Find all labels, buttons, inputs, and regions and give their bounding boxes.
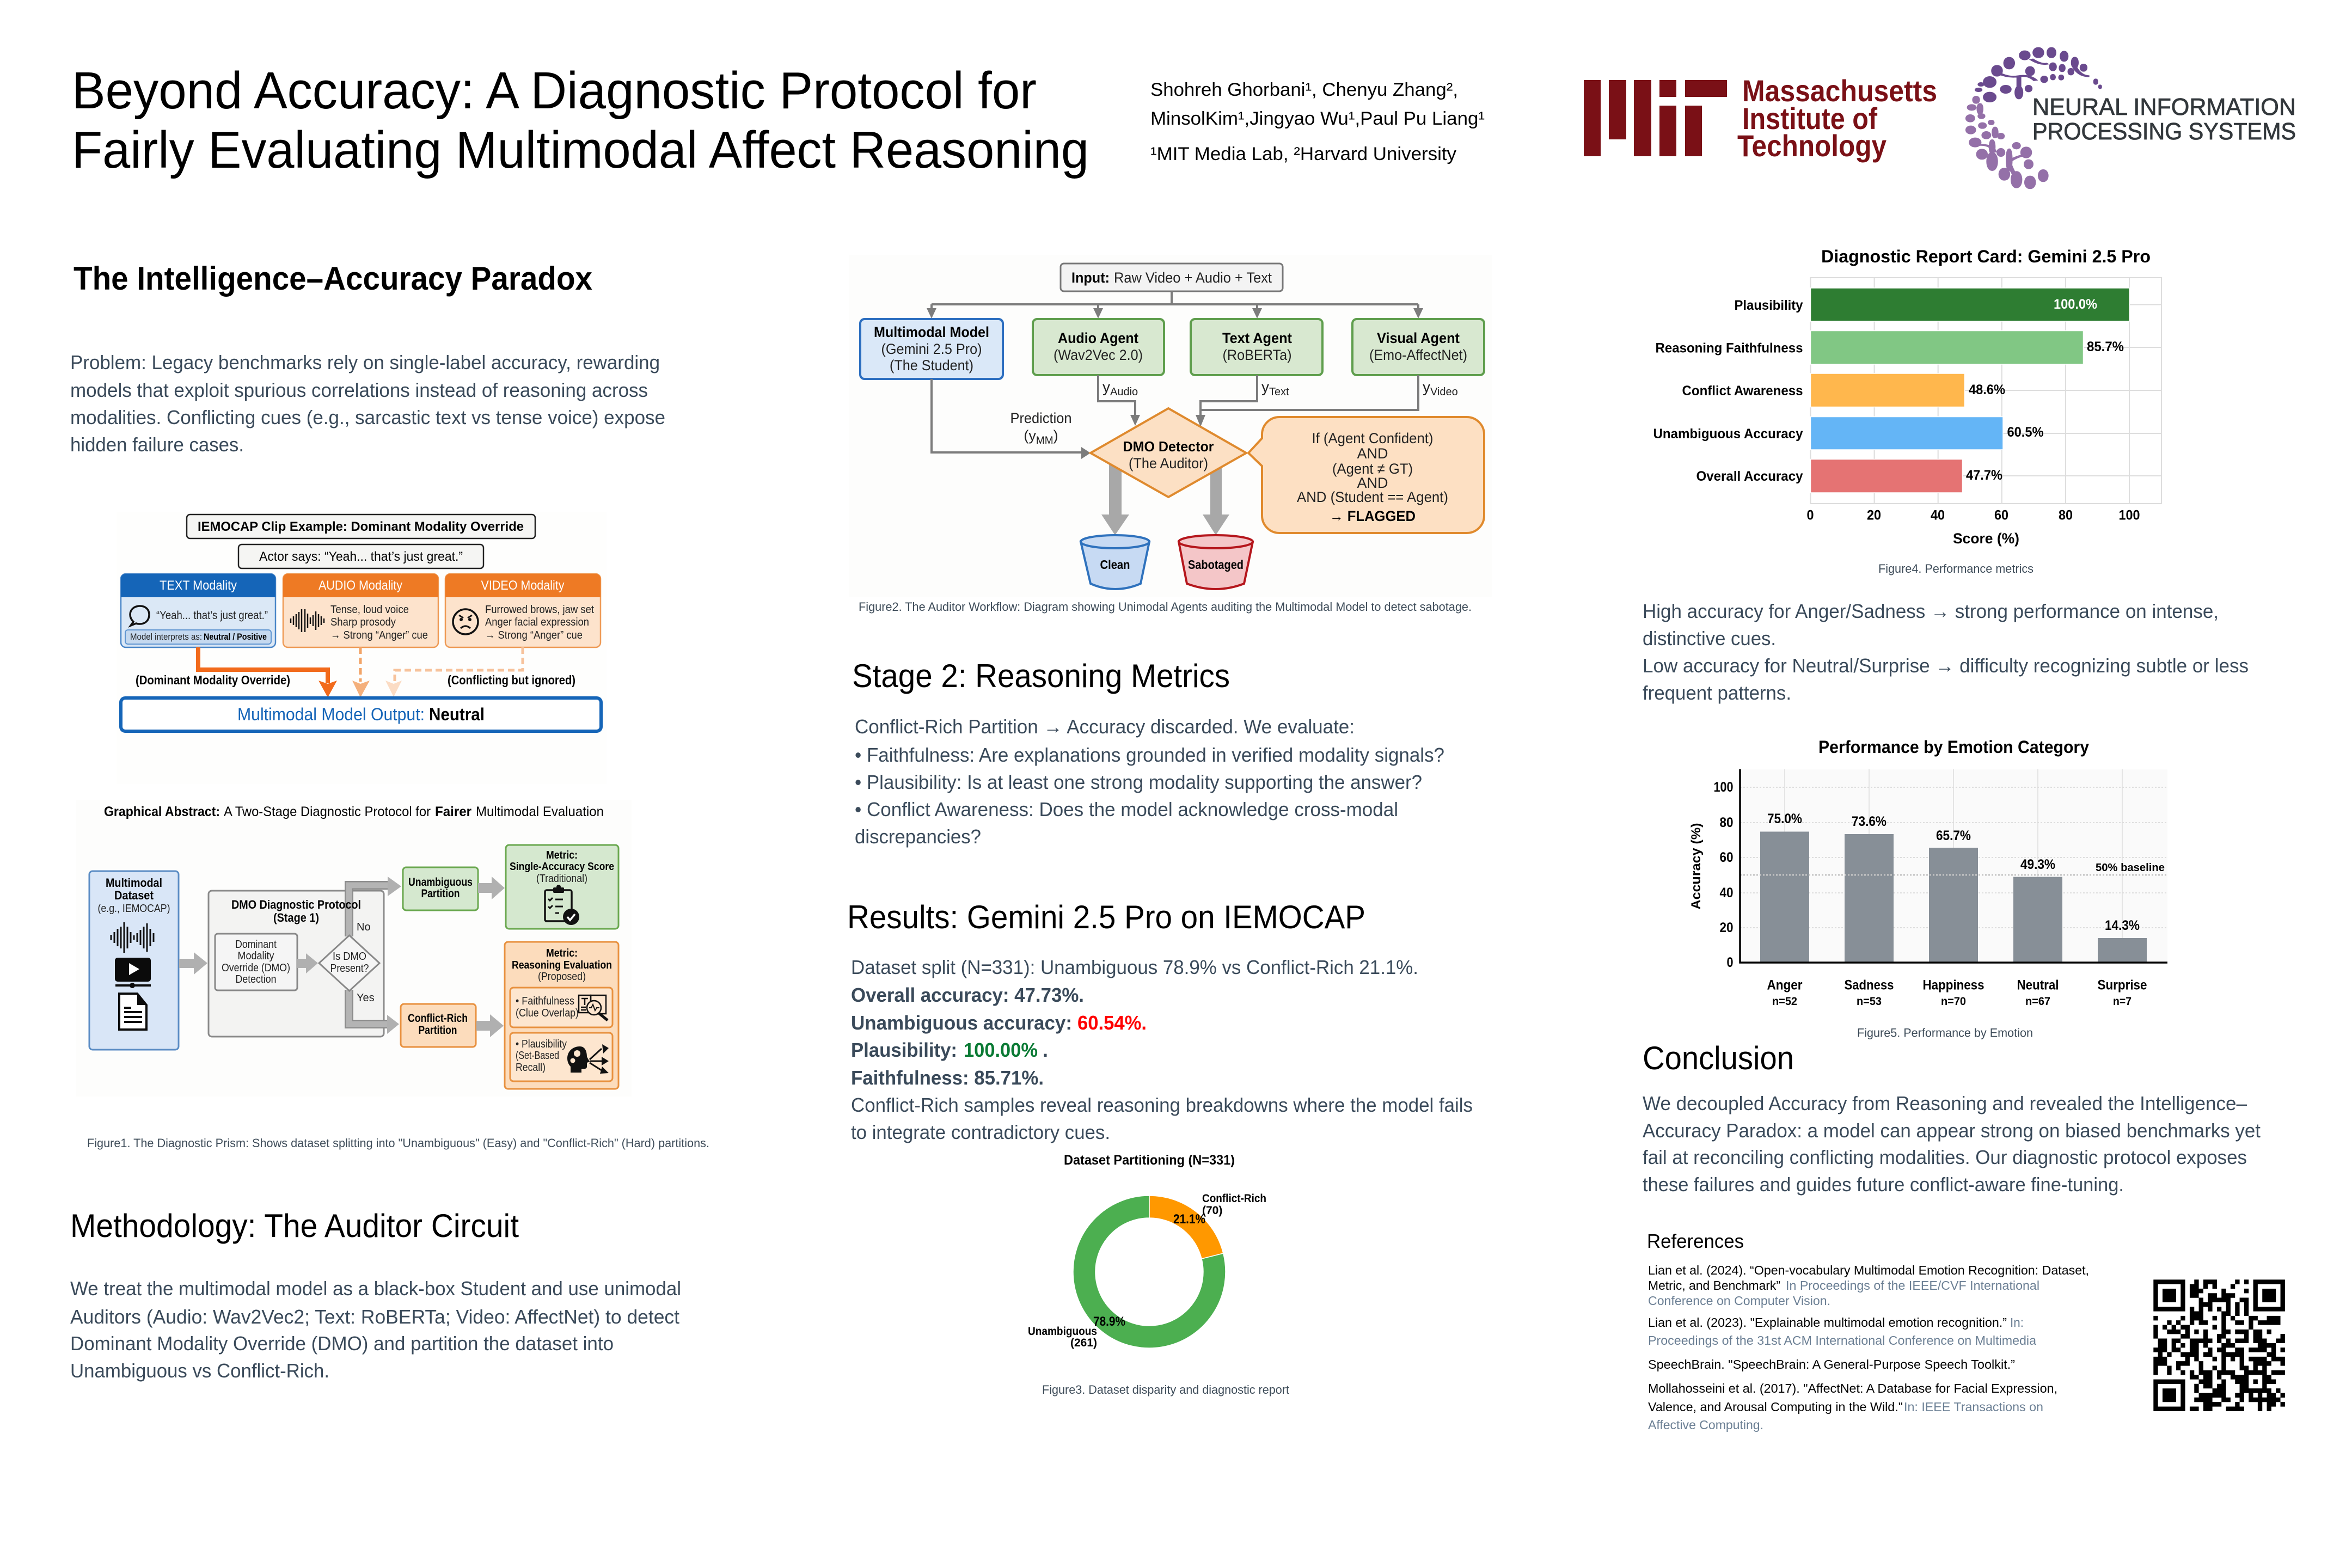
text block: references: Lian et al. (2023). "Explainable multimodal emotion recognition.”: [1648, 1315, 2007, 1330]
diagram: IEMOCAP clip example: [117, 512, 607, 784]
label: unambiguous: (261): [1070, 1337, 1097, 1349]
box: audio agent: [1033, 319, 1164, 375]
heading: conclusion: Conclusion: [1643, 1040, 1794, 1076]
y axis ticks: 0: [1727, 955, 1734, 970]
box: multimodal dataset: Multimodal: [106, 876, 162, 890]
icon: document: [119, 994, 146, 1030]
box: DMO diagnostic protocol: [209, 891, 384, 1037]
card: text modality: [121, 574, 275, 647]
arrow: audio ignored: [352, 647, 370, 697]
icon: speech bubble: [130, 606, 149, 626]
text block: references: In: IEEE Transactions on: [1904, 1400, 2043, 1414]
text block: conclusion: [1643, 1092, 2261, 1196]
box: text agent: (RoBERTa): [1223, 347, 1291, 363]
box: reasoning evaluation metric: Reasoning Evaluation: [512, 959, 612, 971]
card: audio modality: Sharp prosody: [330, 616, 396, 628]
chart: dataset partitioning donut: [1028, 1153, 1266, 1349]
bar: unambiguous accuracy: [1653, 417, 2044, 450]
arrow: dominant modality override: [198, 647, 337, 697]
text block: results: 60.54%.: [1077, 1012, 1147, 1034]
text block: results: Unambiguous accuracy:: [851, 1012, 1072, 1034]
card: audio modality: → Strong “Anger” cue: [330, 629, 428, 641]
logo: MIT: [1584, 74, 1937, 163]
input box: Input:: [1071, 270, 1110, 286]
box: text agent: [1191, 319, 1322, 375]
callout: flagging rule: AND (Student == Agent): [1297, 489, 1448, 505]
text block: references: Metric, and Benchmark”: [1648, 1278, 1780, 1293]
arrow: detection to decision: [297, 953, 318, 973]
box: unambiguous partition: [403, 867, 478, 910]
card: video modality: [445, 574, 601, 647]
bar: surprise: n=7: [2113, 995, 2132, 1008]
label: prediction: ): [1054, 427, 1058, 444]
box: single-accuracy metric: Metric:: [546, 849, 578, 861]
arrow: conflict-rich to metric: [476, 1014, 504, 1037]
text block: references: In:: [2010, 1315, 2024, 1330]
x axis ticks: 80: [2059, 507, 2073, 523]
output box: Multimodal Model Output:: [237, 705, 425, 724]
text block: problem statement: modalities. Conflicting cues (e.g., sarcastic text vs tense voice) expose: [70, 406, 665, 428]
bucket: sabotaged: [1179, 535, 1253, 589]
icon: angry face: [453, 609, 478, 634]
bar: overall accuracy: Overall Accuracy: [1696, 469, 1803, 484]
text block: results: .: [1043, 1039, 1048, 1061]
chart: performance by emotion: [1689, 737, 2167, 1008]
caption: figure 2: Figure2. The Auditor Workflow: Diagram showing Unimodal Agents auditing the Multimodal Model to detect sabotage.: [859, 600, 1472, 614]
bar: sadness: Sadness: [1845, 978, 1894, 993]
bar: anger: Anger: [1767, 978, 1803, 993]
heading: methodology: Methodology: The Auditor Circuit: [70, 1208, 519, 1244]
box: multimodal dataset: Dataset: [114, 889, 154, 902]
text block: methodology: Auditors (Audio: Wav2Vec2; Text: RoBERTa; Video: AffectNet) to detect: [70, 1306, 679, 1328]
chart title: Performance by Emotion Category: [1818, 737, 2089, 757]
decision diamond: [319, 935, 379, 991]
actor quote box: [238, 544, 483, 568]
text block: conclusion: these failures and guides future conflict-aware fine-tuning.: [1643, 1173, 2124, 1196]
box: audio agent: (Wav2Vec 2.0): [1054, 347, 1143, 363]
figure title: Fairer: [435, 804, 471, 819]
output box: [121, 698, 601, 731]
bar: anger: n=52: [1772, 995, 1797, 1008]
text block: reasoning metrics: Conflict-Rich Partition → Accuracy discarded. We evaluate:: [855, 715, 1355, 738]
text block: reasoning metrics: [855, 715, 1444, 848]
bar: neutral: 49.3%: [2020, 857, 2055, 872]
text block: reasoning metrics: • Conflict Awareness: Does the model acknowledge cross-modal: [855, 798, 1398, 820]
bar: sadness: n=53: [1857, 995, 1882, 1008]
bar: surprise: 14.3%: [2105, 918, 2140, 933]
callout: flagging rule: [1248, 417, 1484, 533]
label: conflicting but ignored: (Conflicting but ignored): [448, 673, 575, 687]
box: DMO diagnostic protocol: Dominant: [235, 939, 277, 951]
box: DMO diagnostic protocol: Modality: [237, 950, 274, 962]
y axis ticks: 80: [1719, 815, 1734, 830]
caption: figure 3: Figure3. Dataset disparity and diagnostic report: [1042, 1383, 1289, 1396]
heading: DMO diagnostic protocol: [231, 898, 361, 924]
text block: references: Valence, and Arousal Computing in the Wild.": [1648, 1400, 1903, 1414]
box: multimodal model: (Gemini 2.5 Pro): [881, 341, 982, 357]
bar: unambiguous accuracy: Unambiguous Accuracy: [1653, 426, 1803, 442]
heading: stage 2: Stage 2: Reasoning Metrics: [852, 658, 1230, 694]
text block: problem statement: [70, 351, 665, 456]
box: visual agent: (Emo-AffectNet): [1369, 347, 1467, 363]
text block: accuracy by emotion: [1643, 600, 2249, 704]
box: DMO diagnostic protocol: Detection: [235, 973, 277, 985]
text block: methodology: Dominant Modality Override (DMO) and partition the dataset into: [70, 1332, 614, 1355]
figure title: Graphical Abstract:: [104, 804, 220, 819]
label: prediction: MM: [1036, 435, 1054, 446]
figure title: A Two-Stage Diagnostic Protocol for: [224, 804, 431, 819]
label: 21.1 percent: 21.1%: [1173, 1212, 1205, 1227]
y axis ticks: 40: [1719, 885, 1734, 901]
card: audio modality: AUDIO Modality: [318, 578, 402, 593]
text block: problem statement: Problem: Legacy benchmarks rely on single-label accuracy, rewarding: [70, 351, 660, 373]
text block: conclusion: fail at reconciling conflicting modalities. Our diagnostic protocol exposes: [1643, 1146, 2247, 1168]
x axis ticks: 40: [1931, 507, 1945, 523]
box: audio agent: Audio Agent: [1058, 330, 1138, 346]
authors and affiliations: [1150, 79, 1485, 164]
box: text agent: Text Agent: [1222, 330, 1292, 346]
authors and affiliations: Shohreh Ghorbani¹, Chenyu Zhang²,: [1150, 79, 1458, 100]
box: DMO diagnostic protocol: Override (DMO): [222, 962, 290, 974]
caption: figure 1: Figure1. The Diagnostic Prism: Shows dataset splitting into "Unambiguous" (Easy) and "Conflict-Rich" (Hard) partitions.: [87, 1136, 709, 1150]
card: text modality: Model interprets as:: [130, 632, 202, 642]
text block: accuracy by emotion: distinctive cues.: [1643, 627, 1776, 650]
logo: NeurIPS: [1967, 47, 2296, 189]
bar: plausibility: 100.0%: [2054, 297, 2097, 312]
label: conflict-rich: [1202, 1192, 1266, 1217]
icon: waveform: [111, 922, 154, 953]
heading: The Intelligence–Accuracy Paradox: The Intelligence–Accuracy Paradox: [74, 260, 592, 297]
heading: results: Results: Gemini 2.5 Pro on IEMOCAP: [847, 899, 1365, 935]
logo: NeurIPS: NEURAL INFORMATION: [2032, 94, 2296, 120]
card: audio modality: Tense, loud voice: [330, 604, 409, 616]
input box: Raw Video + Audio + Text: [1114, 270, 1272, 286]
box: unambiguous partition: Unambiguous: [408, 876, 473, 889]
text block: accuracy by emotion: High accuracy for Anger/Sadness → strong performance on intense,: [1643, 600, 2219, 622]
text block: results: to integrate contradictory cues.: [851, 1121, 1110, 1143]
arrows: decision branches: [349, 877, 401, 1034]
title: Fairly Evaluating Multimodal Affect Reasoning: [72, 121, 1089, 179]
figure title: [104, 804, 604, 819]
box: multimodal dataset: (e.g., IEMOCAP): [98, 903, 170, 915]
title box: IEMOCAP clip example: [187, 514, 535, 538]
bar: happiness: n=70: [1941, 995, 1966, 1008]
bar: anger: 75.0%: [1767, 811, 1802, 826]
card: text modality: Neutral / Positive: [204, 632, 267, 642]
box: multimodal model: Multimodal Model: [874, 324, 989, 340]
text block: reasoning metrics: • Faithfulness: Are explanations grounded in verified modality signals?: [855, 744, 1444, 766]
card: text modality: TEXT Modality: [160, 578, 237, 593]
label: prediction: Prediction: [1010, 410, 1071, 426]
box: single-accuracy metric: [506, 845, 618, 929]
sub-box: faithfulness: [510, 988, 612, 1027]
bar: surprise: Surprise: [2097, 978, 2147, 993]
actor quote box: Actor says: “Yeah... that’s just great.”: [259, 549, 463, 564]
text block: results: Plausibility:: [851, 1039, 957, 1061]
bar: neutral: Neutral: [2017, 978, 2059, 993]
label: y video: Video: [1430, 386, 1458, 398]
label: prediction: (y: [1024, 427, 1036, 444]
text block: results: Faithfulness: 85.71%.: [851, 1067, 1044, 1089]
card: text modality: “Yeah... that’s just great.”: [156, 609, 268, 622]
sub-box: plausibility: Recall): [516, 1062, 546, 1074]
box: conflict-rich partition: [401, 1004, 476, 1047]
label: unambiguous: Unambiguous: [1028, 1325, 1097, 1338]
y axis label: Accuracy (%): [1689, 823, 1704, 909]
text block: conclusion: We decoupled Accuracy from Reasoning and revealed the Intelligence–: [1643, 1092, 2247, 1114]
box: visual agent: Visual Agent: [1377, 330, 1460, 346]
bucket: clean: [1081, 535, 1149, 589]
label: conflict-rich: (70): [1202, 1204, 1222, 1217]
figure title: Multimodal Evaluation: [476, 804, 604, 819]
text block: results: Overall accuracy: 47.73%.: [851, 984, 1084, 1006]
text block: methodology: We treat the multimodal model as a black-box Student and use unimodal: [70, 1277, 681, 1300]
heading: DMO diagnostic protocol: DMO Diagnostic Protocol: [231, 898, 361, 911]
bucket: sabotaged: Sabotaged: [1188, 558, 1244, 572]
bar: reasoning faithfulness: 85.7%: [2087, 339, 2124, 354]
text block: accuracy by emotion: frequent patterns.: [1643, 682, 1791, 704]
box: conflict-rich partition: Conflict-Rich: [408, 1012, 468, 1025]
label: y audio: Audio: [1110, 386, 1138, 398]
label: y text: Text: [1269, 386, 1289, 398]
y axis ticks: 100: [1714, 780, 1734, 795]
callout: flagging rule: If (Agent Confident): [1312, 430, 1433, 446]
title box: IEMOCAP clip example: IEMOCAP Clip Example: Dominant Modality Override: [198, 519, 524, 534]
bar: happiness: [1923, 828, 1984, 1008]
box: reasoning evaluation metric: Metric:: [546, 947, 578, 959]
box: single-accuracy metric: Single-Accuracy Score: [510, 861, 614, 873]
arrow: dataset to protocol: [179, 952, 207, 975]
text block: results: Conflict-Rich samples reveal reasoning breakdowns where the model fails: [851, 1094, 1473, 1116]
box: visual agent: [1352, 319, 1484, 375]
diagram: graphical abstract: [76, 800, 632, 1097]
arrows: input fan-out: [927, 291, 1423, 318]
x axis label: Score (%): [1953, 530, 2019, 547]
label: y video: y: [1423, 378, 1430, 395]
label: prediction: [1010, 410, 1071, 446]
bar: unambiguous accuracy: 60.5%: [2007, 425, 2044, 440]
text block: results: [851, 956, 1473, 1143]
text block: references: [1648, 1263, 2089, 1432]
card: video modality: Furrowed brows, jaw set: [485, 604, 594, 616]
x axis ticks: 20: [1867, 507, 1881, 523]
callout: flagging rule: → FLAGGED: [1330, 508, 1416, 524]
logo: NeurIPS: PROCESSING SYSTEMS: [2032, 118, 2296, 145]
text block: conclusion: Accuracy Paradox: a model can appear strong on biased benchmarks yet: [1643, 1119, 2261, 1142]
chart title: Diagnostic Report Card: Gemini 2.5 Pro: [1821, 247, 2151, 266]
text block: methodology: [70, 1277, 681, 1382]
card: audio modality: [283, 574, 438, 647]
chart title: Dataset Partitioning (N=331): [1064, 1153, 1235, 1168]
text block: reasoning metrics: discrepancies?: [855, 825, 981, 848]
sub-box: faithfulness: (Clue Overlap): [516, 1007, 579, 1019]
arrow: video ignored: [385, 647, 523, 697]
label: y audio: y: [1102, 378, 1110, 395]
baseline: 50% baseline: [2096, 862, 2165, 874]
icon: waveform: [291, 609, 324, 632]
text block: accuracy by emotion: Low accuracy for Neutral/Surprise → difficulty recognizing subtle or less: [1643, 654, 2249, 677]
heading: DMO diagnostic protocol: (Stage 1): [273, 911, 319, 924]
bar: neutral: n=67: [2025, 995, 2050, 1008]
label: no: No: [357, 921, 371, 933]
callout: flagging rule: AND: [1357, 475, 1388, 491]
arrows: detector outputs: [1101, 460, 1229, 535]
label: y text: y: [1261, 378, 1269, 395]
diagram: auditor workflow: [849, 255, 1492, 597]
QR code: [2153, 1279, 2285, 1411]
icon: head with arrows: [567, 1044, 609, 1074]
text block: results: Dataset split (N=331): Unambiguous 78.9% vs Conflict-Rich 21.1%.: [851, 956, 1418, 978]
box: single-accuracy metric: (Traditional): [536, 873, 587, 885]
authors and affiliations: MinsolKim¹,Jingyao Wu¹,Paul Pu Liang¹: [1150, 108, 1485, 129]
bar: overall accuracy: 47.7%: [1966, 468, 2002, 483]
box: multimodal dataset: [89, 871, 179, 1050]
text block: references: SpeechBrain. "SpeechBrain: A General-Purpose Speech Toolkit.”: [1648, 1357, 2015, 1371]
card: video modality: Anger facial expression: [485, 616, 589, 628]
bar: reasoning faithfulness: Reasoning Faithfulness: [1655, 341, 1803, 356]
sub-box: plausibility: [510, 1033, 612, 1081]
bar: neutral: [2013, 857, 2062, 1008]
logo: MIT: Technology: [1737, 128, 1886, 163]
bar: anger: [1760, 811, 1809, 1008]
bar: surprise: [2097, 918, 2147, 1008]
bar: overall accuracy: [1696, 460, 2002, 493]
y axis ticks: 60: [1719, 850, 1734, 865]
icon: magnifier on text: [579, 995, 608, 1020]
bar: reasoning faithfulness: [1655, 331, 2124, 364]
box: multimodal model: [860, 319, 1003, 379]
text block: references: Mollahosseini et al. (2017). "AffectNet: A Database for Facial Expression,: [1648, 1381, 2057, 1395]
logo: MIT: Massachusetts: [1742, 74, 1937, 108]
text block: references: Conference on Computer Vision.: [1648, 1294, 1830, 1308]
axes: [1740, 769, 2167, 963]
bar: plausibility: Plausibility: [1735, 298, 1803, 313]
card: video modality: → Strong “Anger” cue: [485, 629, 583, 641]
callout: flagging rule: AND: [1357, 445, 1388, 462]
text block: results: 100.00%: [964, 1039, 1038, 1061]
bar: happiness: 65.7%: [1936, 828, 1971, 843]
bar: plausibility: [1735, 288, 2129, 321]
text block: problem statement: hidden failure cases.: [70, 433, 244, 456]
arrow: unambiguous to metric: [478, 877, 505, 899]
bar: happiness: Happiness: [1923, 978, 1984, 993]
x axis ticks: [1806, 507, 2140, 523]
sub-box: plausibility: (Set-Based: [516, 1050, 559, 1062]
text block: references: In Proceedings of the IEEE/CVF International: [1786, 1278, 2039, 1293]
output box: Neutral: [429, 705, 485, 724]
decision diamond: Present?: [330, 963, 369, 975]
authors and affiliations: ¹MIT Media Lab, ²Harvard University: [1150, 144, 1456, 164]
title: [72, 62, 1089, 179]
caption: figure 4: Figure4. Performance metrics: [1878, 562, 2033, 575]
title: Beyond Accuracy: A Diagnostic Protocol for: [72, 62, 1037, 120]
heading: references: References: [1647, 1230, 1744, 1252]
sub-box: plausibility: • Plausibility: [516, 1038, 567, 1050]
x axis ticks: 60: [1994, 507, 2008, 523]
text block: methodology: Unambiguous vs Conflict-Rich.: [70, 1359, 329, 1382]
donut segment: unambiguous: [1073, 1196, 1226, 1348]
y axis ticks: [1714, 780, 1734, 970]
text block: references: Proceedings of the 31st ACM International Conference on Multimedia: [1648, 1333, 2036, 1347]
icon: clipboard check: [545, 885, 579, 925]
diamond: DMO detector: DMO Detector: [1123, 438, 1214, 455]
box: reasoning evaluation metric: [505, 942, 618, 1089]
bar: sadness: 73.6%: [1852, 814, 1886, 829]
label: y video: [1423, 378, 1458, 398]
card: video modality: VIDEO Modality: [481, 578, 564, 593]
label: dominant modality override: (Dominant Modality Override): [136, 673, 290, 687]
label: yes: Yes: [357, 992, 375, 1004]
sub-box: faithfulness: • Faithfulness: [516, 995, 574, 1007]
label: y audio: [1102, 378, 1138, 398]
donut segment: conflict-rich: [1149, 1196, 1223, 1259]
x axis ticks: 100: [2119, 507, 2140, 523]
input box: [1061, 264, 1283, 291]
box: multimodal model: (The Student): [890, 357, 973, 373]
text block: reasoning metrics: • Plausibility: Is at least one strong modality supporting the answer?: [855, 771, 1422, 793]
y axis ticks: 20: [1719, 920, 1734, 935]
logo: MIT: Institute of: [1742, 101, 1877, 136]
text block: references: Affective Computing.: [1648, 1418, 1763, 1432]
bar: conflict awareness: Conflict Awareness: [1682, 383, 1803, 399]
text block: problem statement: models that exploit spurious correlations instead of reasoning across: [70, 379, 648, 401]
decision diamond: Is DMO: [333, 951, 366, 963]
box: conflict-rich partition: Partition: [418, 1024, 457, 1037]
x axis ticks: 0: [1806, 507, 1814, 523]
diamond: DMO detector: (The Auditor): [1129, 455, 1208, 471]
arrows: agents to detector: [932, 375, 1418, 459]
callout: flagging rule: (Agent ≠ GT): [1332, 461, 1413, 477]
box: reasoning evaluation metric: (Proposed): [538, 971, 586, 983]
label: conflict-rich: Conflict-Rich: [1202, 1192, 1266, 1205]
caption: figure 5: Figure5. Performance by Emotion: [1857, 1026, 2033, 1040]
bucket: clean: Clean: [1100, 558, 1130, 572]
bar: conflict awareness: 48.6%: [1969, 382, 2005, 397]
chart: diagnostic report card: [1653, 247, 2161, 547]
bar: conflict awareness: [1682, 373, 2005, 407]
label: y text: [1261, 378, 1289, 398]
box: unambiguous partition: Partition: [421, 887, 460, 900]
bar: sadness: [1845, 814, 1894, 1008]
icon: video player: [115, 958, 151, 988]
diamond: DMO detector: [1091, 408, 1246, 497]
label: unambiguous: [1028, 1325, 1097, 1349]
text block: references: Lian et al. (2024). “Open-vocabulary Multimodal Emotion Recognition: Dataset,: [1648, 1263, 2089, 1277]
label: 78.9 percent: 78.9%: [1093, 1314, 1125, 1329]
